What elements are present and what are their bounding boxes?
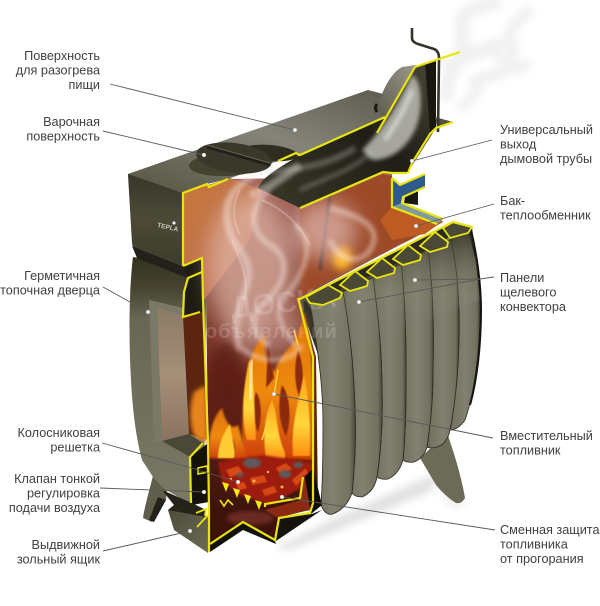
floor shadow — [275, 470, 470, 550]
label: door: Герметичная — [24, 269, 100, 283]
stove body — [128, 90, 481, 553]
door interior — [183, 312, 208, 440]
door top ledge — [132, 246, 190, 279]
left labels — [0, 49, 101, 566]
watermark: объявлений — [205, 321, 338, 343]
label: cooking surface: Варочная — [43, 115, 100, 129]
label: ash box: Выдвижной — [32, 538, 100, 552]
yellow cut outline — [183, 52, 472, 552]
label: ash box: зольный ящик — [17, 552, 100, 566]
label: cooking surface: поверхность — [26, 130, 100, 144]
ash chamber — [212, 500, 310, 540]
label: air valve: Клапан тонкой — [14, 472, 100, 486]
flange — [435, 117, 453, 127]
right rear leg — [420, 433, 465, 503]
label: chimney outlet: Универсальный — [500, 123, 593, 137]
door seal — [183, 258, 203, 317]
chimney glow — [362, 75, 421, 160]
ribbed panels — [310, 231, 480, 514]
top face — [128, 90, 395, 193]
rib section profiles — [306, 222, 472, 305]
label: heat exchanger: Бак- — [500, 194, 525, 208]
leader lines and points — [100, 84, 495, 551]
ash box handle — [162, 490, 206, 517]
smoke above the flue — [445, 2, 532, 110]
label: replaceable protection: от прогорания — [500, 552, 584, 566]
dark underside — [276, 510, 322, 541]
label: chimney outlet: выход — [500, 138, 537, 152]
flames — [208, 312, 313, 460]
rib top shading — [310, 230, 480, 360]
pink haze — [208, 193, 292, 337]
cone outer — [377, 65, 416, 120]
rear plate in coal area — [265, 470, 316, 518]
label: grate: решетка — [50, 440, 101, 454]
heat exchanger tank — [300, 174, 443, 296]
label: chimney outlet: дымовой трубы — [500, 152, 592, 166]
label: replaceable protection: Сменная защита — [500, 523, 600, 537]
label: convector panels: конвектора — [500, 300, 567, 314]
smoke in the chamber — [227, 165, 374, 360]
flue and chimney — [258, 28, 453, 208]
label: door: топочная дверца — [0, 284, 101, 298]
logo: TEPLA — [157, 222, 179, 233]
upper copper cavity — [183, 172, 443, 543]
ash box — [168, 507, 209, 553]
back glow — [332, 246, 352, 270]
label: firebox: топливник — [500, 444, 561, 458]
label: heat exchanger: теплообменник — [500, 208, 591, 222]
left rear leg — [143, 476, 168, 522]
label: heating surface: для разогрева — [16, 64, 101, 78]
label: replaceable protection: топливника — [500, 538, 569, 552]
right labels — [500, 123, 600, 566]
insulation channel — [392, 174, 443, 224]
coals — [218, 455, 312, 505]
watermark — [205, 281, 339, 343]
wire hook — [412, 28, 439, 132]
watermark: ДОСКА — [229, 281, 339, 325]
grate block — [190, 444, 220, 505]
grate teeth — [222, 482, 262, 510]
door block — [130, 257, 206, 505]
door recess panel — [157, 307, 189, 441]
label: air valve: регулировка — [27, 486, 101, 500]
label: heating surface: пищи — [69, 78, 100, 92]
right edge — [470, 230, 481, 405]
top box side face — [128, 174, 183, 266]
firebox interior — [183, 172, 443, 552]
vertical plate — [425, 60, 436, 132]
smoke over flue — [265, 148, 372, 190]
label: convector panels: Панели — [500, 271, 544, 285]
label: air valve: подачи воздуха — [9, 501, 101, 515]
label: firebox: Вместительный — [500, 429, 593, 443]
cooking lid — [188, 138, 299, 178]
label: grate: Колосниковая — [18, 426, 100, 440]
dark flue — [258, 60, 436, 208]
rib band under section — [298, 222, 480, 360]
label: convector panels: щелевого — [500, 286, 556, 300]
dark lower left zone — [210, 343, 242, 407]
door lower ledge — [162, 434, 204, 457]
label: heating surface: Поверхность — [24, 49, 100, 63]
